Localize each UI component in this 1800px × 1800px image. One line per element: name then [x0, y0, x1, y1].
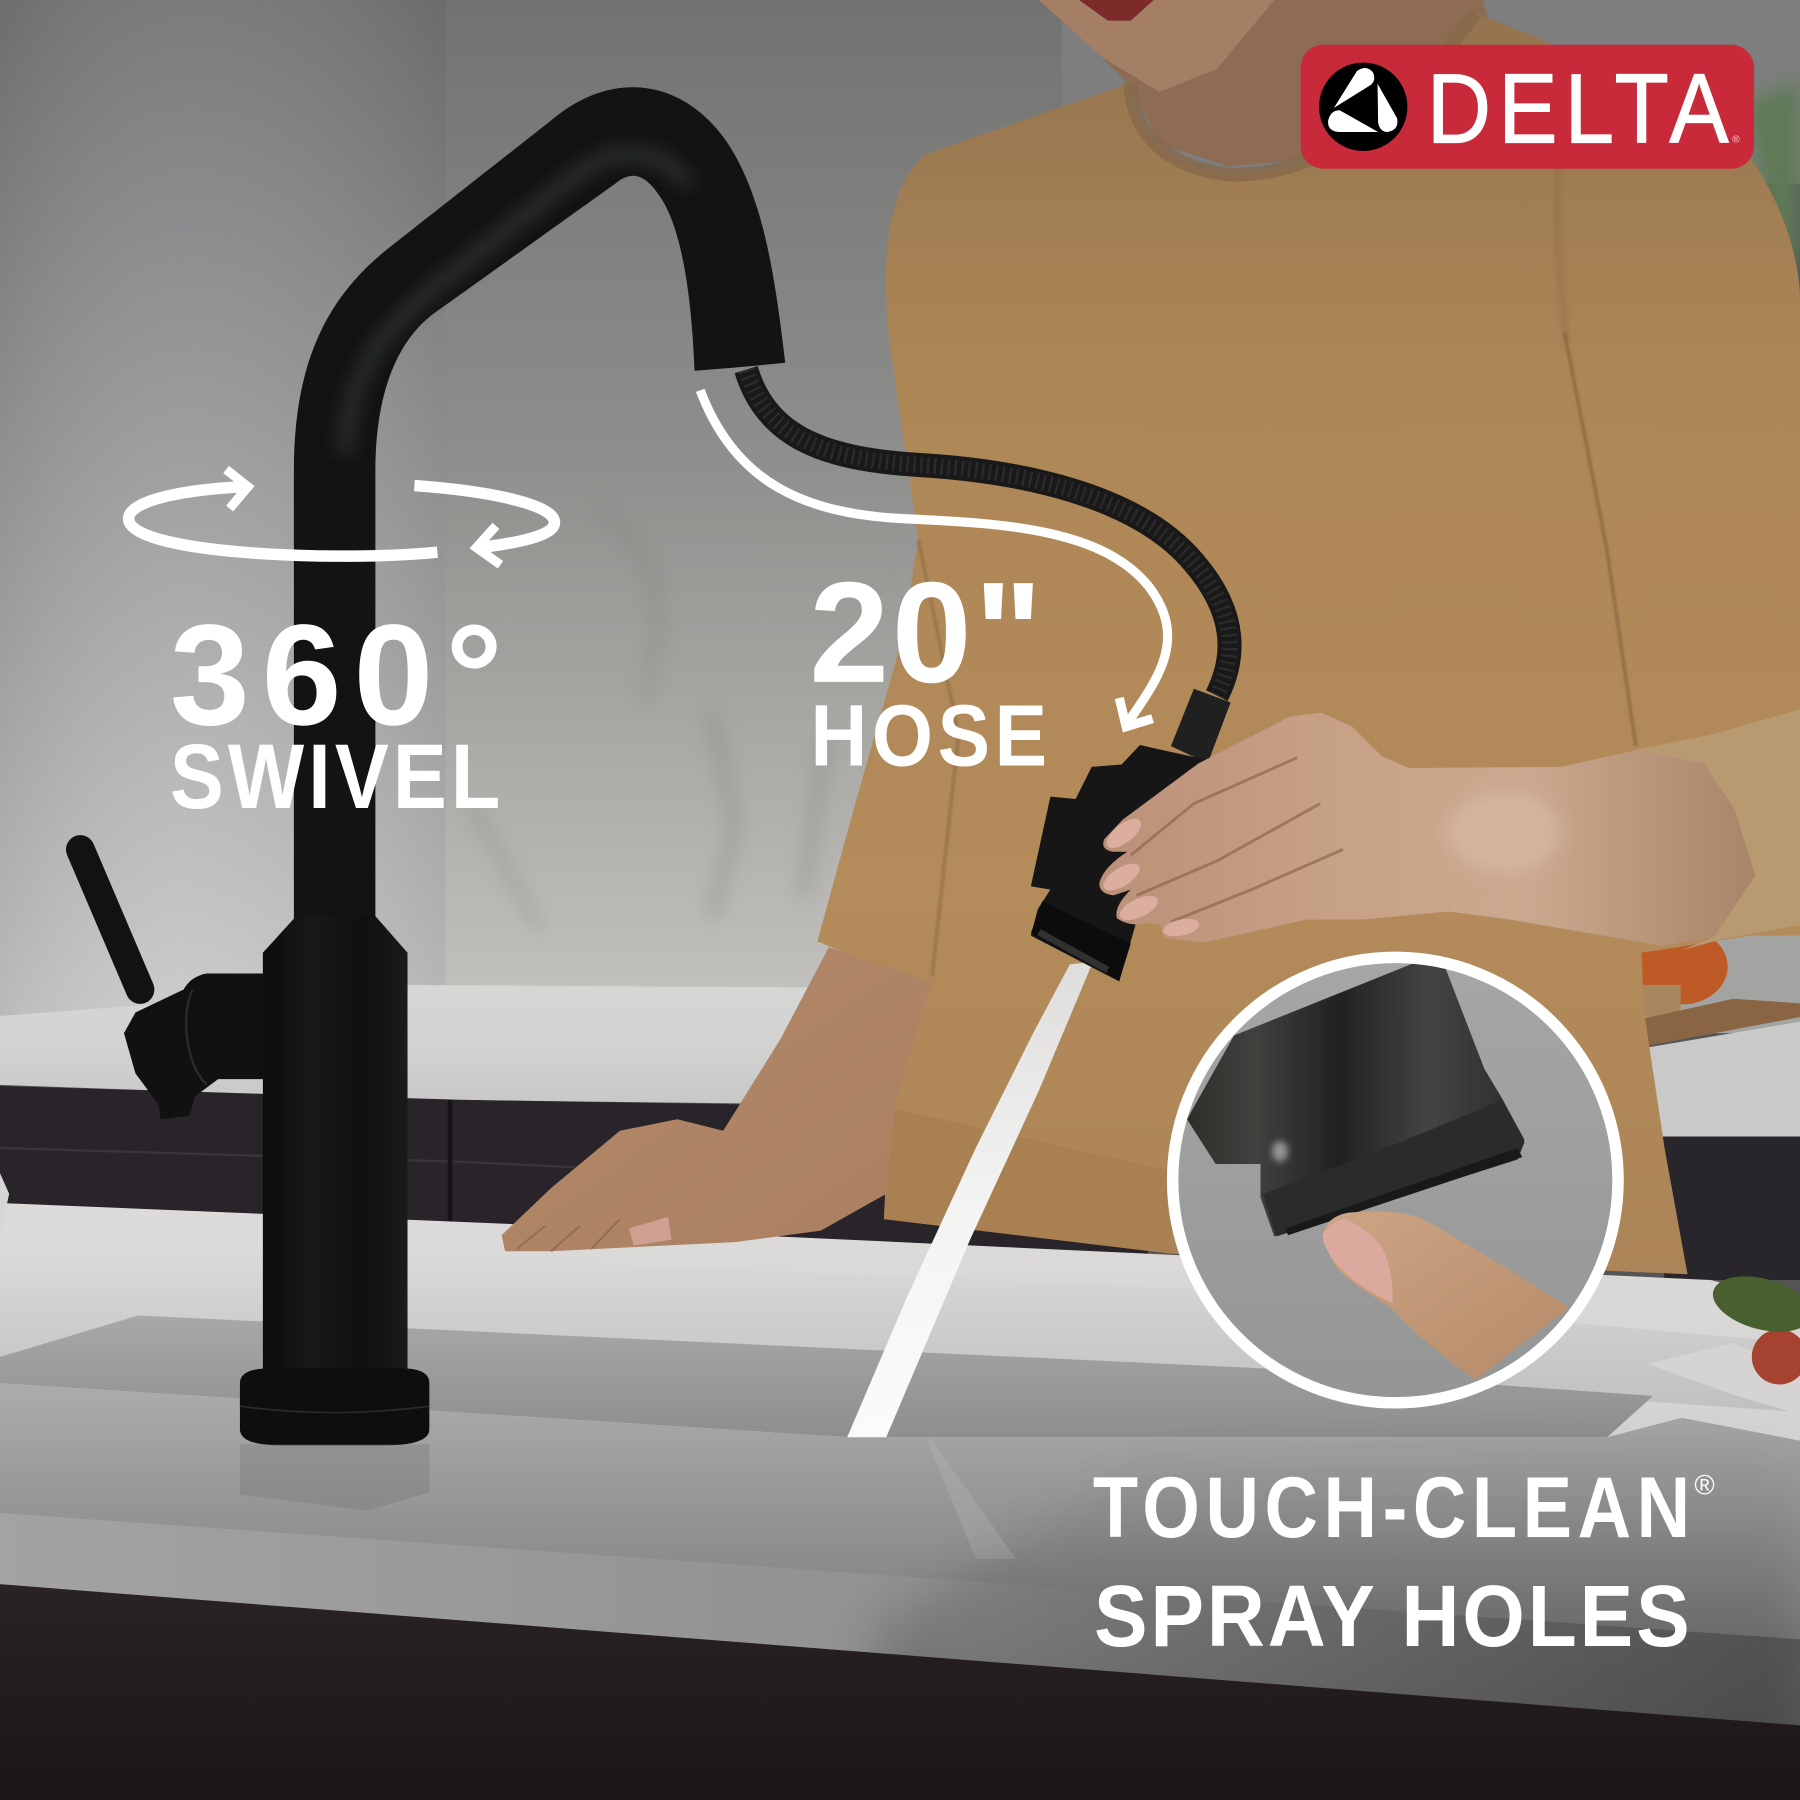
Delta logo badge: ® [1732, 134, 1740, 145]
label: 20 inch hose [809, 553, 1047, 785]
countertop and sink [0, 1173, 1800, 1728]
chin [1039, 0, 1274, 92]
handle lever [80, 849, 140, 990]
label: touch-clean spray holes [1093, 1460, 1715, 1665]
spout highlight [344, 154, 689, 453]
lips [1079, 0, 1154, 21]
fingernail [1322, 1219, 1393, 1303]
wordmark: DELTA [1427, 53, 1729, 163]
sink basin [0, 1316, 1653, 1437]
base reflection [240, 1444, 429, 1511]
dark overlay behind bottom caption [872, 1412, 1800, 1768]
water stream [847, 962, 1093, 1437]
sleeve cuff [1636, 709, 1800, 951]
label: touch-clean spray holes: SPRAY HOLES [1094, 1567, 1690, 1665]
side handle joint [124, 973, 264, 1119]
plate and salad [1647, 1267, 1800, 1414]
Delta logo badge [1301, 45, 1754, 169]
label: 360 degree swivel: SWIVEL [170, 726, 500, 828]
left arm and hand on counter [502, 947, 932, 1251]
callout circle: touch-clean spray holes close-up [1173, 953, 1618, 1403]
neck and chin [1039, 0, 1492, 166]
label: 360 degree swivel: 360° [170, 595, 503, 755]
close-up spray head [1187, 953, 1524, 1236]
right forearm and hand [1099, 713, 1755, 946]
person [817, 0, 1800, 1274]
label: 20 inch hose: HOSE [810, 687, 1047, 785]
sweater torso and sleeves [817, 14, 1800, 1274]
label: 360 degree swivel [170, 595, 503, 828]
rear counter deck [0, 1203, 1800, 1515]
hose length arrow [700, 390, 1168, 727]
sink rim [0, 1248, 1800, 1412]
swivel rotation arrows [129, 470, 554, 565]
spout tube [294, 87, 785, 924]
faucet [80, 87, 785, 1511]
orange fruit and cutting board [1636, 929, 1800, 1047]
pull-down hose [746, 370, 1230, 696]
logo mark [1319, 63, 1407, 151]
label: touch-clean spray holes: ® [1694, 1470, 1715, 1501]
faucet body [263, 916, 408, 1383]
pull-down spray head [1031, 689, 1231, 982]
faucet base ring [240, 1368, 429, 1445]
label: 20 inch hose: 20" [809, 553, 1042, 713]
dark cabinet front [0, 1584, 1800, 1800]
label: touch-clean spray holes: TOUCH-CLEAN [1093, 1460, 1690, 1556]
kitchen background [0, 0, 1800, 1280]
front counter surface [0, 1383, 1800, 1644]
fingertip [1322, 1211, 1569, 1380]
counter front edge [0, 1513, 1800, 1728]
white ring [1173, 957, 1618, 1403]
fingernails [1099, 813, 1201, 939]
